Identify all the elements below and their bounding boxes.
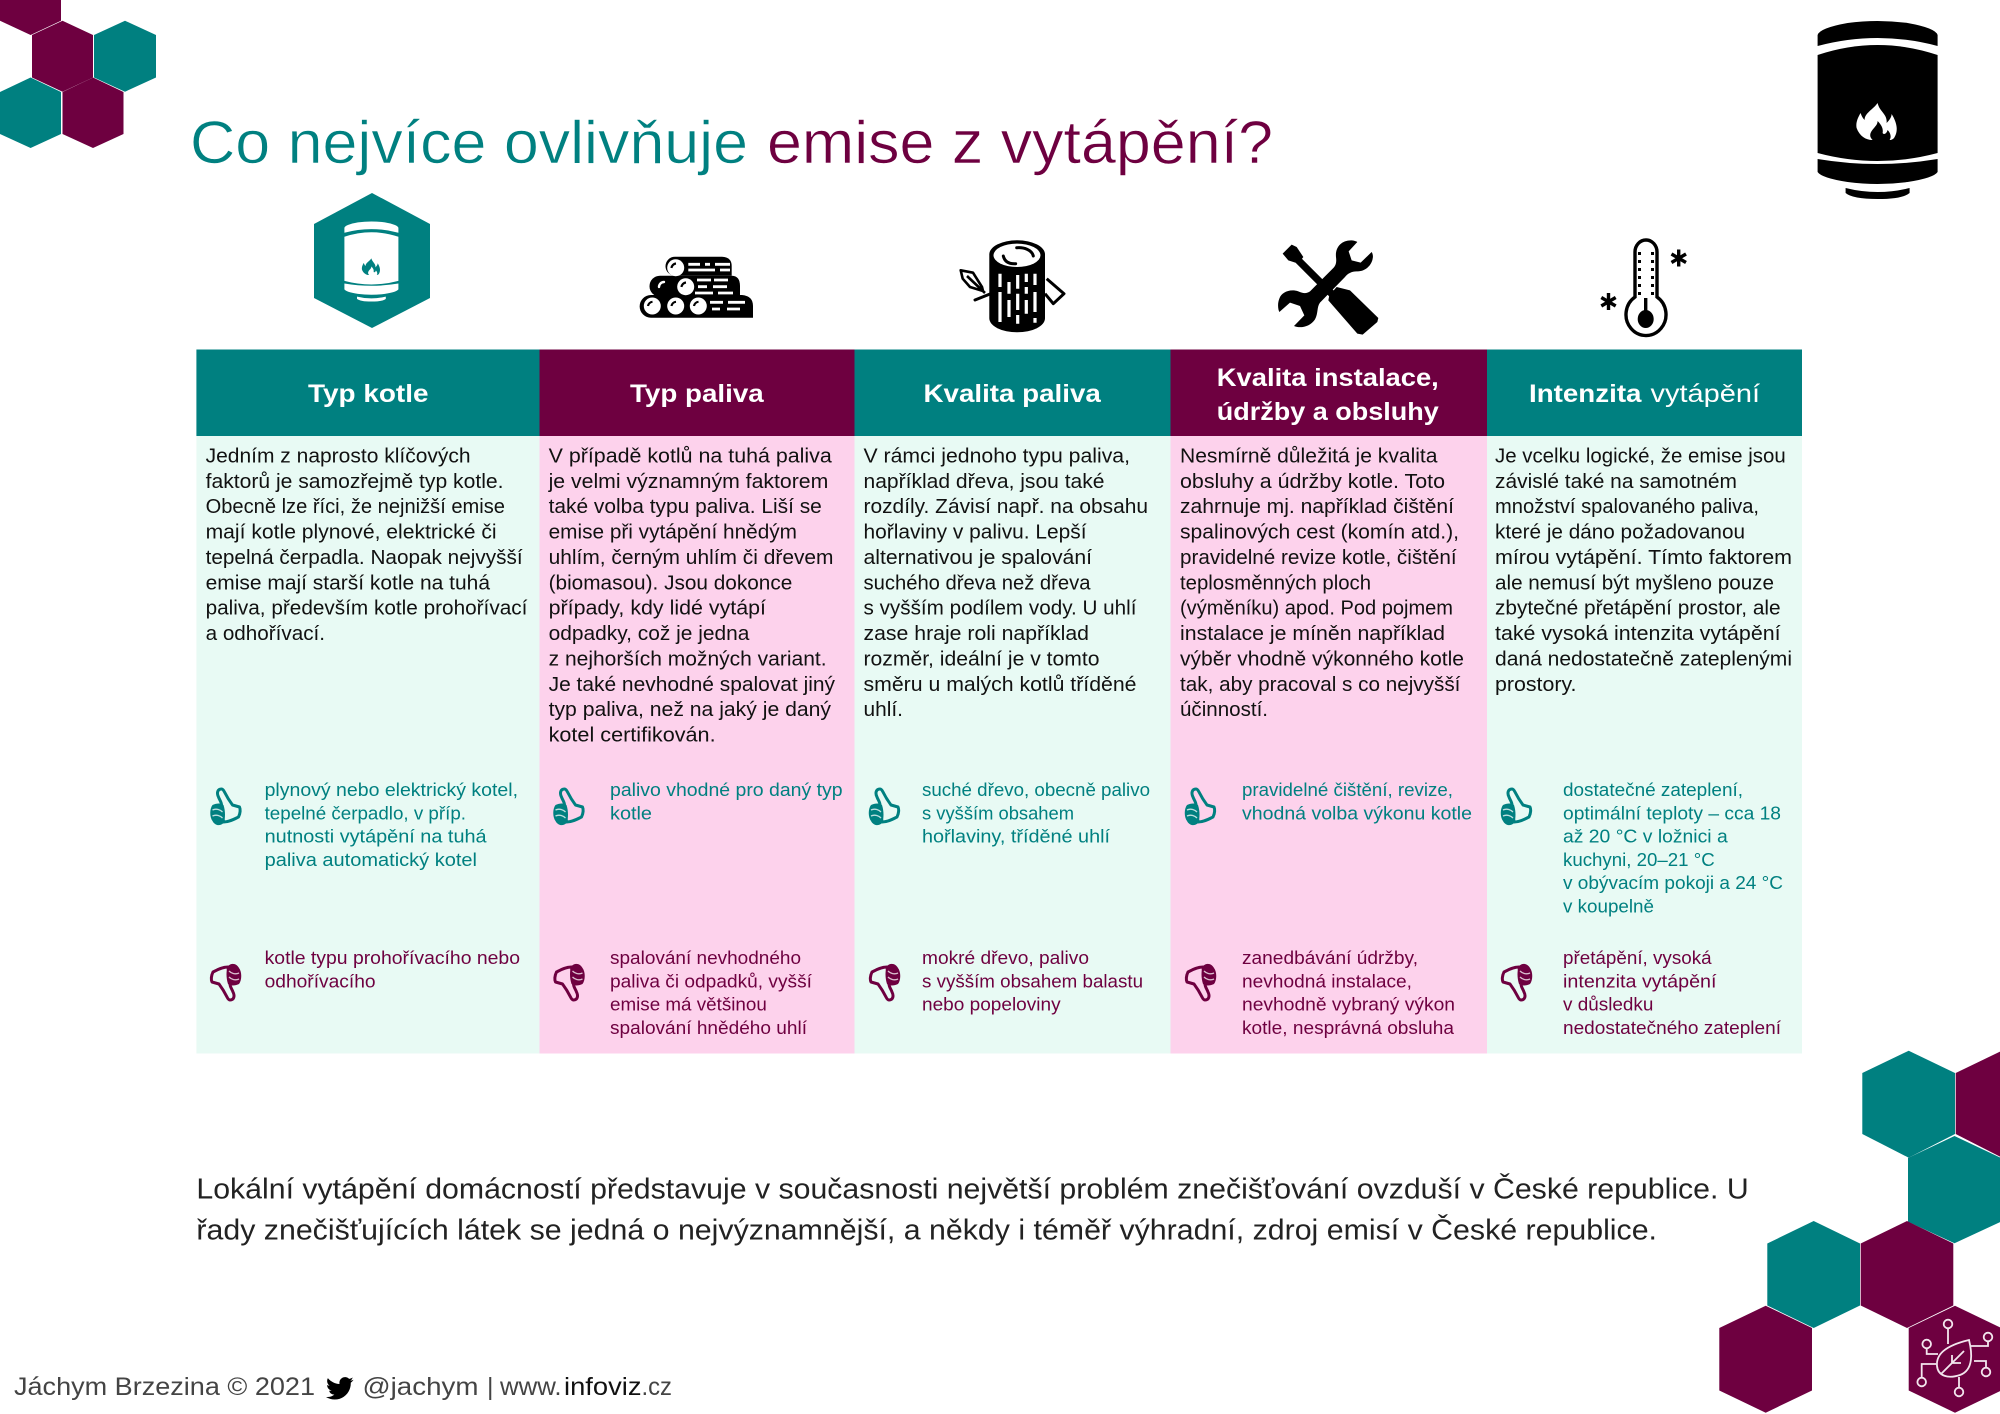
- cons: Typ paliva: emise má většinou: [610, 995, 767, 1015]
- text block: Kvalita paliva description: rozdíly. Závisí např. na obsahu: [864, 496, 1148, 518]
- text block: Intenzita vytápění description: které je dáno požadovanou: [1495, 522, 1745, 544]
- text block: Kvalita instalace description: instalace je míněn například: [1180, 623, 1445, 645]
- text block: Kvalita paliva description: V rámci jednoho typu paliva,: [864, 446, 1130, 468]
- text block: Kvalita paliva description: rozměr, ideální je v tomto: [864, 648, 1100, 670]
- text block: closing paragraph: [196, 1172, 1749, 1246]
- heading: Typ kotle: Typ kotle: [308, 380, 429, 408]
- pros: Typ kotle: paliva automatický kotel: [265, 850, 477, 870]
- pros: Kvalita paliva: s vyšším obsahem: [922, 803, 1074, 823]
- text block: Kvalita instalace description: teplosměnných ploch: [1180, 572, 1371, 594]
- text block: Typ paliva description: V případě kotlů na tuhá paliva: [549, 446, 833, 468]
- heading: Kvalita paliva: Kvalita paliva: [924, 380, 1102, 408]
- footer credit: [14, 1373, 672, 1401]
- text block: Typ paliva description: uhlím, černým uhlím či dřevem: [549, 547, 834, 569]
- text block: Intenzita vytápění description: Je vcelku logické, že emise jsou: [1495, 446, 1786, 468]
- text block: Kvalita paliva description: hořlaviny v palivu. Lepší: [864, 522, 1087, 544]
- text block: Typ paliva description: typ paliva, než na jaký je daný: [549, 699, 831, 721]
- text block: Typ kotle description: tepelná čerpadla. Naopak nejvyšší: [206, 547, 523, 569]
- cons: Intenzita: nedostatečného zateplení: [1563, 1018, 1781, 1038]
- cons: Kvalita instalace: nevhodně vybraný výkon: [1242, 995, 1455, 1015]
- text block: Typ paliva description: Je také nevhodné spalovat jiný: [549, 674, 835, 696]
- heading: Kvalita instalace, údržby a obsluhy: Kvalita instalace,: [1217, 364, 1439, 392]
- icon: thumb down, Kvalita instalace: [1186, 964, 1216, 1000]
- pros: Kvalita paliva: [922, 780, 1150, 847]
- heading: Intenzita vytápění: [1529, 380, 1760, 408]
- title: [190, 109, 1273, 176]
- icon: large black boiler: [1818, 21, 1938, 199]
- text block: Intenzita vytápění description: zbytečné přetápění prostor, ale: [1495, 598, 1781, 620]
- text block: Kvalita instalace description: tak, aby pracoval s co nejvyšší: [1180, 674, 1461, 696]
- text block: Kvalita instalace description: účinností.: [1180, 699, 1268, 721]
- pros: Typ paliva: kotle: [610, 803, 652, 823]
- cons: Typ paliva: paliva či odpadků, vyšší: [610, 971, 812, 991]
- text block: Typ kotle description: Obecně lze říci, že nejnižší emise: [206, 496, 505, 518]
- text block: Typ kotle description: emise mají starší kotle na tuhá: [206, 572, 491, 594]
- pros: Typ paliva: [610, 780, 843, 823]
- text block: Kvalita instalace description: obsluhy a údržby kotle. Toto: [1180, 471, 1445, 493]
- pros: Typ kotle: plynový nebo elektrický kotel,: [265, 780, 518, 800]
- icon: thumb up, Typ paliva: [553, 789, 583, 825]
- text block: Typ kotle description: mají kotle plynové, elektrické či: [206, 522, 497, 544]
- cons: Kvalita instalace: [1242, 948, 1455, 1038]
- text block: Kvalita paliva description: suchého dřeva než dřeva: [864, 572, 1091, 594]
- cons: Typ paliva: spalování nevhodného: [610, 948, 801, 968]
- heading: Kvalita instalace, údržby a obsluhy: údržby a obsluhy: [1217, 398, 1439, 426]
- cons: Intenzita: přetápění, vysoká: [1563, 948, 1713, 968]
- text block: Typ kotle description: a odhořívací.: [206, 623, 325, 645]
- text block: Typ kotle description: [206, 446, 528, 645]
- heading: Intenzita vytápění: Intenzita: [1529, 380, 1643, 408]
- text block: Typ paliva description: kotel certifikován.: [549, 724, 716, 746]
- text block: Kvalita instalace description: Nesmírně důležitá je kvalita: [1180, 446, 1438, 468]
- pros: Intenzita: dostatečné zateplení,: [1563, 780, 1743, 800]
- text block: Typ paliva description: je velmi významným faktorem: [548, 471, 828, 493]
- footer credit: infoviz: [564, 1373, 642, 1401]
- text block: Intenzita vytápění description: [1495, 446, 1792, 696]
- heading: Intenzita vytápění: vytápění: [1650, 380, 1760, 408]
- pros: Typ kotle: tepelné čerpadlo, v příp.: [265, 803, 466, 823]
- icon: boiler in teal hexagon: [314, 193, 430, 328]
- cons: Kvalita paliva: [922, 948, 1143, 1015]
- text block: Typ paliva description: emise při vytápění hnědým: [549, 522, 797, 544]
- text block: Intenzita vytápění description: závislé také na samotném: [1495, 471, 1737, 493]
- cons: Intenzita: intenzita vytápění: [1563, 971, 1716, 991]
- pros: Intenzita: až 20 °C v ložnici a: [1563, 827, 1729, 847]
- pros: Intenzita: kuchyni, 20–21 °C: [1563, 850, 1715, 870]
- pros: Intenzita: v obývacím pokoji a 24 °C: [1563, 873, 1783, 893]
- footer credit: |: [487, 1373, 494, 1401]
- cons: Intenzita: v důsledku: [1563, 995, 1653, 1015]
- pros: Typ paliva: palivo vhodné pro daný typ: [610, 780, 843, 800]
- pros: Intenzita: v koupelně: [1563, 896, 1654, 916]
- text block: Typ paliva description: také volba typu paliva. Liší se: [549, 496, 822, 518]
- title: emise z vytápění?: [767, 109, 1273, 176]
- cons: Typ kotle: [265, 948, 520, 991]
- text block: Kvalita instalace description: pravidelné revize kotle, čištění: [1180, 547, 1457, 569]
- text block: Intenzita vytápění description: množství spalovaného paliva,: [1495, 496, 1759, 518]
- cons: Kvalita paliva: mokré dřevo, palivo: [922, 948, 1089, 968]
- pros: Kvalita paliva: suché dřevo, obecně palivo: [922, 780, 1150, 800]
- panel: column backgrounds and header bars: [196, 350, 1802, 1054]
- cons: Kvalita instalace: zanedbávání údržby,: [1242, 948, 1418, 968]
- text block: Typ paliva description: (biomasou). Jsou dokonce: [549, 572, 792, 594]
- text block: Typ paliva description: případy, kdy lidé vytápí: [549, 598, 766, 620]
- pros: Typ kotle: nutnosti vytápění na tuhá: [265, 827, 488, 847]
- icon: thumb down, Intenzita: [1502, 964, 1532, 1000]
- heading: Kvalita instalace, údržby a obsluhy: [1217, 364, 1439, 426]
- hexagon cluster bottom right: [1719, 1051, 2000, 1413]
- icon: thumb up, Kvalita paliva: [869, 789, 899, 825]
- text block: Typ kotle description: paliva, především kotle prohořívací: [206, 598, 528, 620]
- pros: Intenzita: optimální teploty – cca 18: [1563, 803, 1781, 823]
- icon: thumb down, Typ paliva: [555, 964, 585, 1000]
- heading: Typ paliva: Typ paliva: [630, 380, 765, 408]
- pros: Kvalita instalace: pravidelné čištění, revize,: [1242, 780, 1453, 800]
- icon: thumb up, Intenzita: [1501, 789, 1531, 825]
- icon: crossed wrench and screwdriver: [1278, 240, 1378, 335]
- text block: Kvalita instalace description: (výměníku) apod. Pod pojmem: [1180, 598, 1453, 620]
- icon: thumb down, Kvalita paliva: [870, 964, 900, 1000]
- text block: Kvalita instalace description: spalinových cest (komín atd.),: [1180, 522, 1459, 544]
- cons: Kvalita instalace: kotle, nesprávná obsluha: [1242, 1018, 1455, 1038]
- icon: leaf with circuit nodes: [1917, 1320, 1992, 1396]
- text block: Kvalita instalace description: zahrnuje mj. například čištění: [1180, 496, 1454, 518]
- text block: Kvalita instalace description: [1180, 446, 1464, 721]
- text block: Kvalita paliva description: například dřeva, jsou také: [864, 471, 1104, 493]
- icon: thermometer with snowflakes: [1601, 240, 1686, 336]
- text block: closing paragraph: řady znečišťujících látek se jedná o nejvýznamnější, a někdy i téměř výhradní, zdroj emisí v České republice.: [196, 1212, 1657, 1246]
- icon: thumb up, Typ kotle: [210, 789, 240, 825]
- text block: Intenzita vytápění description: ale nemusí být myšleno pouze: [1495, 572, 1774, 594]
- cons: Typ paliva: spalování hnědého uhlí: [610, 1018, 807, 1038]
- text block: Kvalita paliva description: alternativou je spalování: [864, 547, 1092, 569]
- cons: Typ kotle: odhořívacího: [265, 971, 376, 991]
- pros: Kvalita instalace: [1242, 780, 1472, 823]
- text block: Typ paliva description: odpadky, což je jedna: [549, 623, 750, 645]
- pros: Intenzita: [1563, 780, 1783, 916]
- hexagon cluster top left: [0, 0, 156, 148]
- text block: Typ paliva description: z nejhorších možných variant.: [549, 648, 827, 670]
- text block: Kvalita paliva description: [864, 446, 1148, 721]
- text block: Intenzita vytápění description: prostory.: [1495, 674, 1576, 696]
- icon: tree log with leaf: [961, 240, 1064, 332]
- text block: Intenzita vytápění description: daná nedostatečně zateplenými: [1495, 648, 1792, 670]
- icon: thumb up, Kvalita instalace: [1185, 789, 1215, 825]
- text block: Kvalita instalace description: výběr vhodně výkonného kotle: [1180, 648, 1464, 670]
- footer credit: @jachym: [362, 1373, 478, 1401]
- pros: Typ kotle: [265, 780, 518, 870]
- cons: Kvalita instalace: nevhodná instalace,: [1242, 971, 1412, 991]
- text block: Typ kotle description: faktorů je samozřejmě typ kotle.: [206, 471, 504, 493]
- pros: Kvalita paliva: hořlaviny, tříděné uhlí: [922, 827, 1110, 847]
- text block: closing paragraph: Lokální vytápění domácností představuje v současnosti největší problém znečišťování ovzduší v České republice. U: [196, 1172, 1749, 1206]
- text block: Kvalita paliva description: uhlí.: [864, 699, 903, 721]
- cons: Typ paliva: [610, 948, 812, 1038]
- icon: thumb down, Typ kotle: [211, 964, 241, 1000]
- footer credit: Jáchym Brzezina © 2021: [14, 1373, 315, 1401]
- text block: Kvalita paliva description: zase hraje roli například: [864, 623, 1089, 645]
- cons: Kvalita paliva: s vyšším obsahem balastu: [922, 971, 1143, 991]
- text block: Intenzita vytápění description: také vysoká intenzita vytápění: [1495, 623, 1781, 645]
- text block: Kvalita paliva description: s vyšším podílem vody. U uhlí: [864, 598, 1137, 620]
- cons: Intenzita: [1563, 948, 1781, 1038]
- text block: Typ kotle description: Jedním z naprosto klíčových: [206, 446, 471, 468]
- pros: Kvalita instalace: vhodná volba výkonu kotle: [1242, 803, 1472, 823]
- text block: Kvalita paliva description: směru u malých kotlů tříděné: [864, 674, 1136, 696]
- cons: Typ kotle: kotle typu prohořívacího nebo: [265, 948, 520, 968]
- icon: stacked logs: [640, 257, 753, 318]
- footer credit: www.: [499, 1373, 562, 1401]
- title: Co nejvíce ovlivňuje: [190, 109, 748, 176]
- icon: twitter bird: [326, 1377, 354, 1400]
- text block: Typ paliva description: [548, 446, 835, 746]
- cons: Kvalita paliva: nebo popeloviny: [922, 995, 1061, 1015]
- footer credit: .cz: [642, 1373, 672, 1401]
- text block: Intenzita vytápění description: mírou vytápění. Tímto faktorem: [1495, 547, 1792, 569]
